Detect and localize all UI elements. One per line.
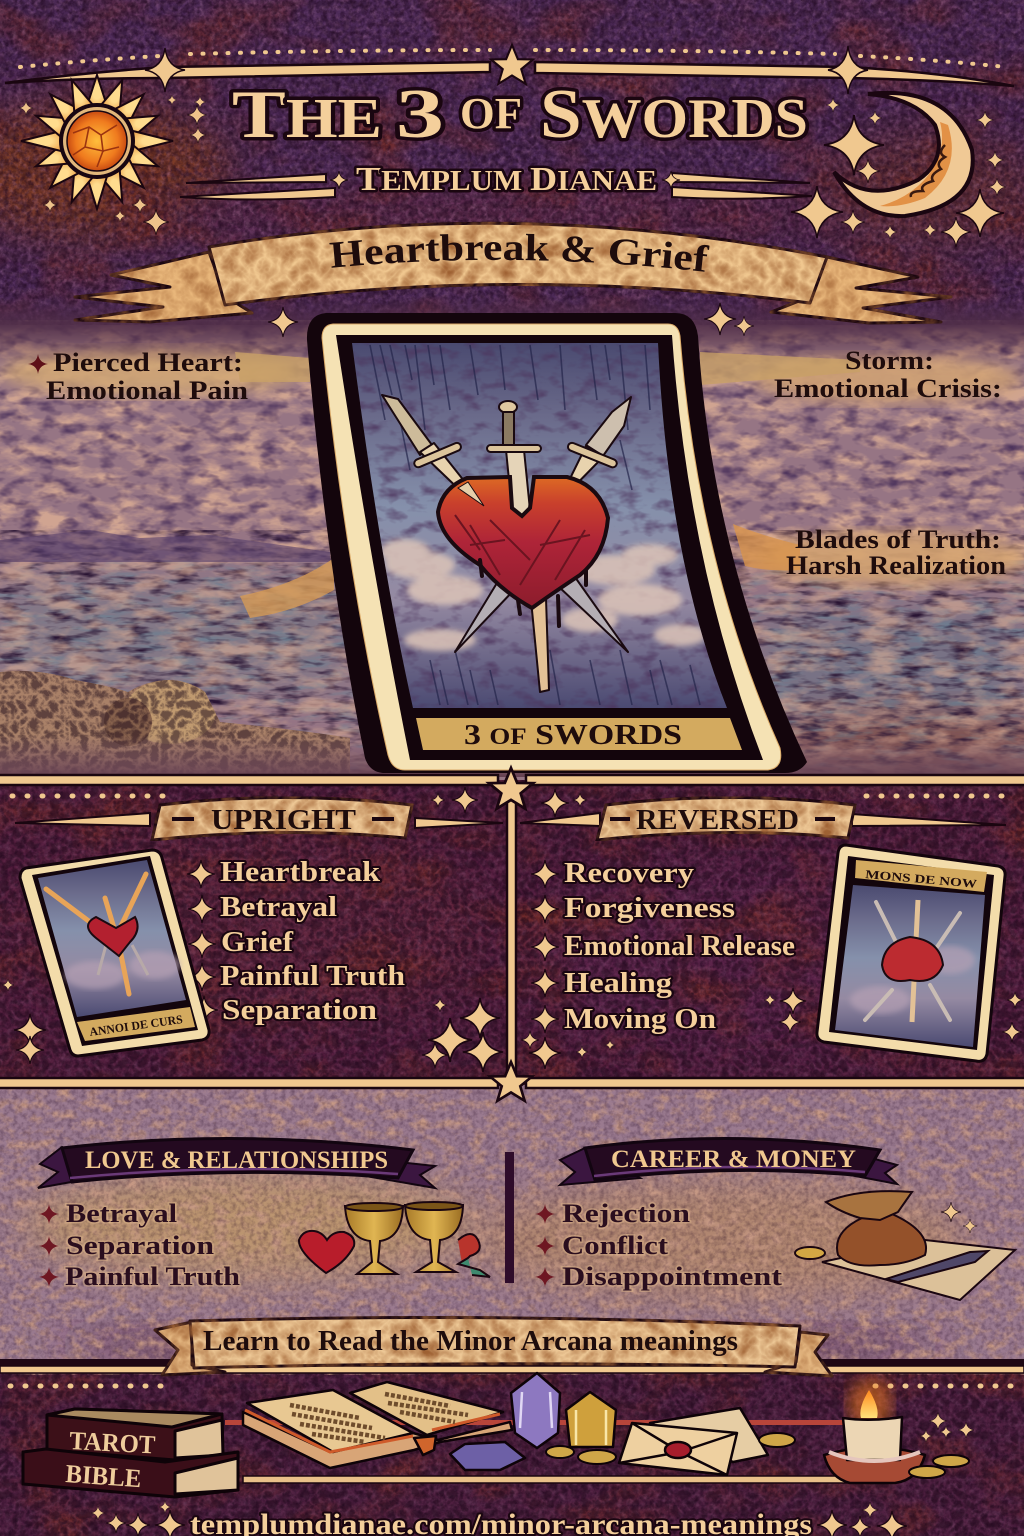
icon: coin bag, paper and pen bbox=[795, 1191, 1015, 1300]
icon: heart and chalices bbox=[299, 1202, 490, 1277]
mini card: reversed bbox=[817, 845, 1005, 1061]
lower shelf line bbox=[243, 1476, 853, 1483]
upright list: Heartbreak bbox=[220, 857, 380, 888]
divider bbox=[505, 1152, 514, 1283]
reversed list: Forgiveness bbox=[564, 893, 735, 924]
icon: crescent moon bbox=[834, 93, 973, 216]
callout: storm bbox=[774, 346, 1002, 403]
sparkle cluster: reversed bbox=[521, 789, 1023, 1069]
moon sparkles bbox=[791, 98, 1006, 247]
banner: love and relationships bbox=[38, 1138, 435, 1188]
sparkle rows bbox=[10, 796, 1016, 1386]
career list bbox=[535, 1199, 782, 1291]
book titles: TAROT bbox=[69, 1426, 156, 1459]
banner: reversed: REVERSED bbox=[636, 805, 799, 836]
love list: Betrayal bbox=[66, 1199, 177, 1228]
candle sparkles bbox=[91, 1412, 974, 1520]
divider band bbox=[0, 1359, 1024, 1373]
title: 3 bbox=[396, 76, 444, 153]
reversed list: Recovery bbox=[564, 858, 694, 889]
callout: blades of truth bbox=[786, 525, 1007, 580]
career list: Conflict bbox=[562, 1231, 668, 1260]
banner: reversed bbox=[520, 798, 1006, 840]
banner: upright bbox=[15, 798, 503, 840]
title bbox=[232, 76, 808, 153]
callout: storm: Storm: bbox=[845, 346, 934, 375]
ribbons behind card bbox=[235, 352, 860, 618]
icon: tarot and bible books bbox=[23, 1409, 238, 1497]
callout: storm: Emotional Crisis: bbox=[774, 374, 1002, 403]
icon: coins bbox=[546, 1433, 969, 1478]
book titles: BIBLE bbox=[65, 1459, 142, 1493]
subtitle: Templum Dianae bbox=[180, 161, 812, 200]
banner: love and relationships: LOVE & RELATIONSHIPS bbox=[85, 1147, 388, 1174]
card artwork bbox=[354, 343, 718, 708]
banner: learn to read: Learn to Read the Minor Arcana meanings bbox=[203, 1326, 738, 1357]
upright list: Separation bbox=[222, 995, 377, 1026]
mini card: reversed: MONS DE NOW bbox=[865, 867, 978, 891]
banner: Heartbreak & Grief bbox=[74, 222, 952, 338]
love list: Separation bbox=[66, 1231, 215, 1260]
title: THE bbox=[232, 76, 382, 152]
main tarot card bbox=[307, 313, 807, 773]
reversed list: Emotional Release bbox=[564, 931, 795, 962]
banner: learn to read bbox=[155, 1317, 832, 1376]
mini card: upright bbox=[20, 850, 209, 1056]
icon: candle bbox=[824, 1379, 925, 1483]
icon: sun bbox=[21, 75, 173, 209]
upright list bbox=[187, 857, 405, 1026]
swords and heart bbox=[382, 395, 631, 692]
career list: Rejection bbox=[562, 1199, 691, 1228]
callout: pierced heart: Emotional Pain bbox=[46, 376, 249, 405]
card title: 3 OF SWORDS bbox=[464, 719, 682, 751]
mini card: upright: ANNOI DE CURS bbox=[88, 1012, 184, 1039]
subtitle: Templum Dianae: TEMPLUM DIANAE bbox=[356, 161, 657, 198]
banner: career and money: CAREER & MONEY bbox=[611, 1146, 856, 1173]
sun sparkles bbox=[19, 95, 207, 235]
section rules bbox=[0, 768, 1024, 1101]
banner: career and money bbox=[560, 1138, 897, 1185]
upright list: Grief bbox=[221, 927, 294, 958]
banner: upright: UPRIGHT bbox=[211, 805, 356, 836]
title: SWORDS bbox=[540, 76, 808, 153]
reversed list: Moving On bbox=[564, 1004, 716, 1035]
upright list: Painful Truth bbox=[220, 961, 405, 992]
love list bbox=[39, 1199, 241, 1291]
book titles bbox=[65, 1426, 156, 1493]
icon: crystals bbox=[450, 1373, 616, 1470]
callout: blades of truth: Harsh Realization bbox=[786, 551, 1007, 580]
sparkle cluster: upright bbox=[2, 787, 503, 1072]
title: OF bbox=[460, 89, 522, 138]
icon: open book bbox=[243, 1382, 512, 1468]
reversed list: Healing bbox=[564, 968, 672, 999]
love list: Painful Truth bbox=[65, 1262, 241, 1291]
icon: envelope and letter bbox=[619, 1408, 768, 1475]
callout: pierced heart: Pierced Heart: bbox=[53, 348, 243, 377]
callout: blades of truth: Blades of Truth: bbox=[795, 525, 1001, 554]
callout: pierced heart bbox=[28, 348, 249, 405]
reversed list bbox=[531, 858, 795, 1035]
upright list: Betrayal bbox=[220, 892, 337, 923]
banner: Heartbreak & Grief: Heartbreak & Grief bbox=[329, 234, 710, 272]
career list: Disappointment bbox=[562, 1262, 782, 1291]
top ornamental rule bbox=[5, 45, 1014, 94]
